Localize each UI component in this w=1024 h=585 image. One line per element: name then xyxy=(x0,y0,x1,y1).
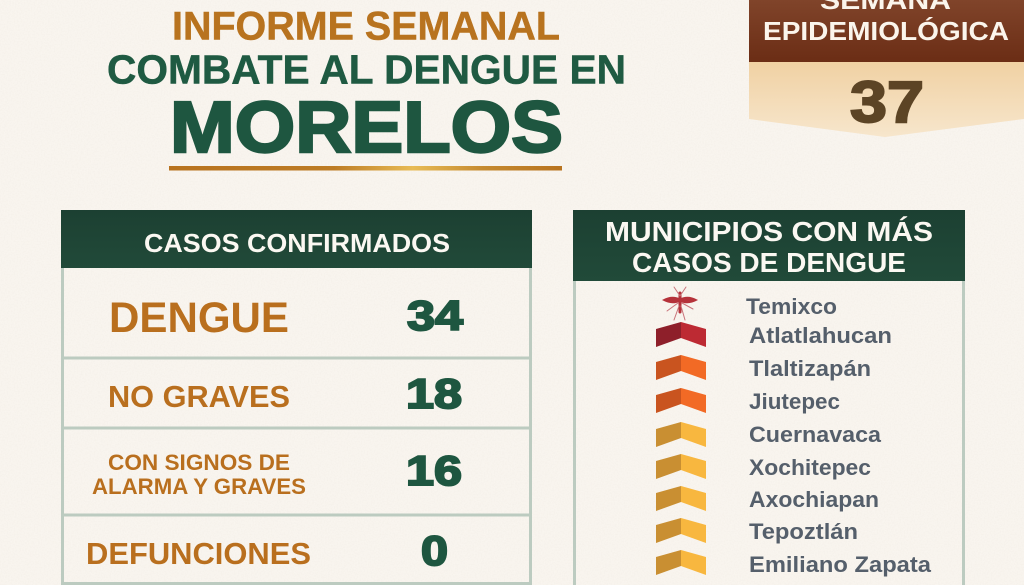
value: no graves: 18 xyxy=(406,370,462,417)
row: con signos de alarma y graves: CON SIGNOS DE xyxy=(108,450,290,475)
municipality list: Cuernavaca xyxy=(749,422,882,447)
panel header xyxy=(61,210,532,268)
icon: chevron yellow xyxy=(656,422,706,447)
value: defunciones: 0 xyxy=(421,527,448,574)
row: defunciones: DEFUNCIONES xyxy=(86,536,311,571)
badge value background xyxy=(749,62,1024,137)
badge header xyxy=(749,0,1024,62)
municipality list: Temixco xyxy=(746,294,837,319)
panel heading line 1: MUNICIPIOS CON MÁS xyxy=(605,216,933,247)
title line: combate al dengue en: COMBATE AL DENGUE EN xyxy=(107,46,626,92)
row: defunciones xyxy=(86,527,448,574)
label line 2: ALARMA Y GRAVES xyxy=(92,474,306,499)
title line: informe semanal: INFORME SEMANAL xyxy=(172,4,560,48)
municipality list: Tlaltizapán xyxy=(749,356,871,381)
panel frame xyxy=(62,268,531,585)
panel header xyxy=(573,210,965,281)
panel heading line 2: CASOS DE DENGUE xyxy=(632,247,906,278)
icon: chevron yellow xyxy=(656,550,706,575)
icon: chevron yellow xyxy=(656,486,706,511)
row: no graves xyxy=(108,370,462,417)
panel heading: CASOS CONFIRMADOS xyxy=(144,228,450,258)
municipality list: Xochitepec xyxy=(749,455,871,480)
panel frame xyxy=(574,281,964,585)
icon: mosquito xyxy=(663,287,697,320)
row: con signos de alarma y graves xyxy=(92,447,462,499)
municipality list: Axochiapan xyxy=(749,487,879,512)
value: alarma y graves: 16 xyxy=(406,447,462,494)
badge: semana epidemiológica xyxy=(749,0,1024,137)
row: no graves: NO GRAVES xyxy=(108,379,290,414)
panel: casos confirmados xyxy=(61,210,532,585)
municipality list: Jiutepec xyxy=(749,389,840,414)
title line: morelos: MORELOS xyxy=(170,88,563,168)
municipality list: Tepoztlán xyxy=(749,519,858,544)
icon: chevron red xyxy=(656,322,706,347)
value: dengue: 34 xyxy=(407,292,464,339)
municipality list: Emiliano Zapata xyxy=(749,552,932,577)
row: dengue xyxy=(109,292,464,342)
title underline xyxy=(169,166,562,170)
row: dengue: DENGUE xyxy=(109,294,289,342)
icon: chevron orange xyxy=(656,388,706,413)
panel: municipios xyxy=(573,210,965,585)
week number: 37 xyxy=(850,70,924,135)
icon: chevron orange xyxy=(656,355,706,380)
icon: chevron yellow xyxy=(656,518,706,543)
municipality list: Atlatlahucan xyxy=(749,323,892,348)
icon: chevron yellow xyxy=(656,454,706,479)
title xyxy=(107,4,626,170)
badge heading line 2: EPIDEMIOLÓGICA xyxy=(763,16,1009,46)
municipality list xyxy=(746,294,932,577)
